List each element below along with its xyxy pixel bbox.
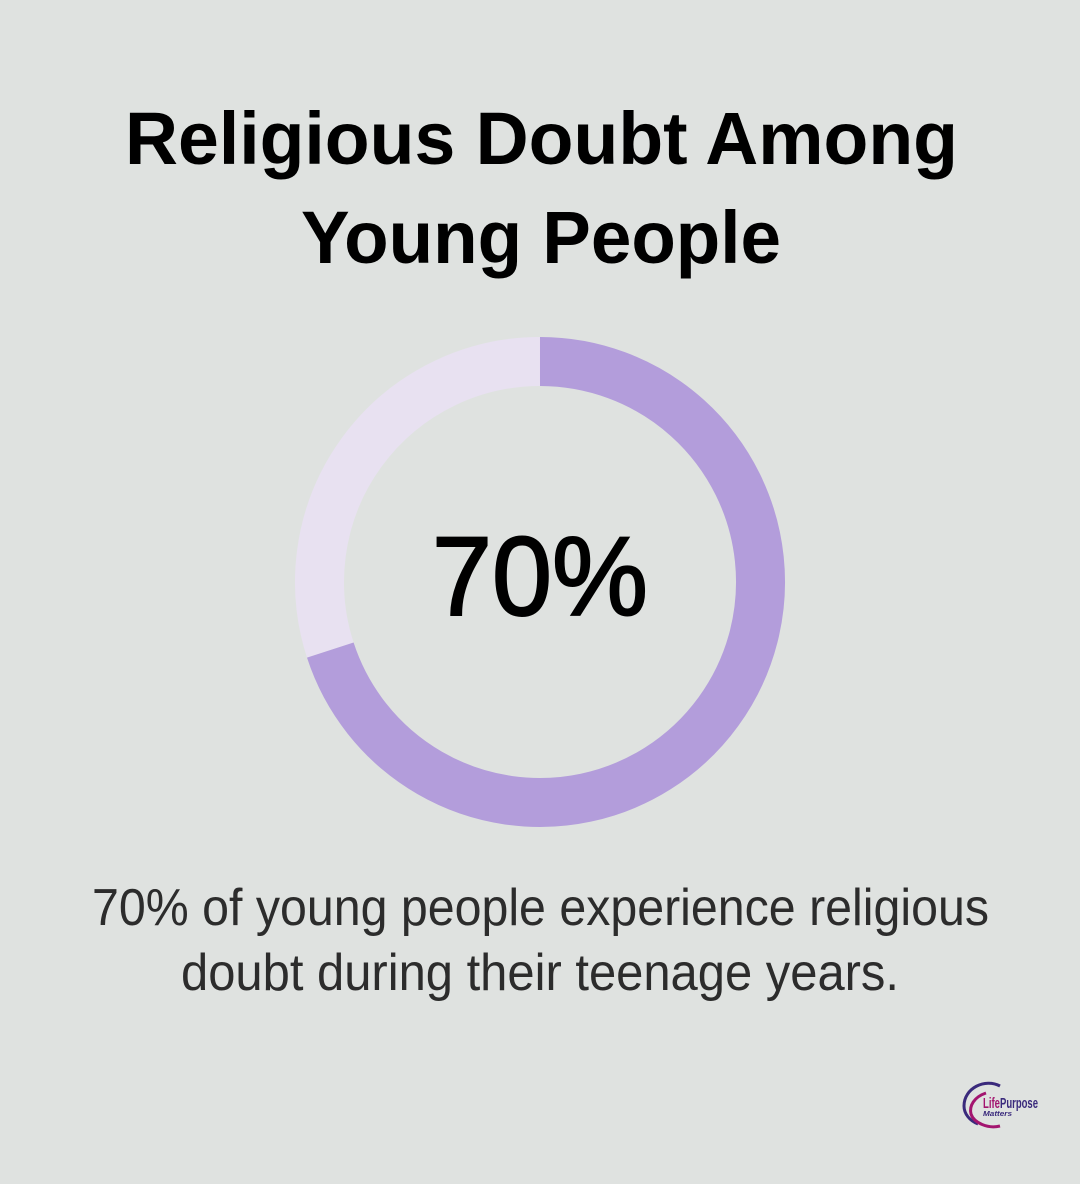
description: doubt during their teenage years. bbox=[181, 944, 899, 1002]
logo: Matters bbox=[983, 1109, 1012, 1118]
logo: Life bbox=[983, 1095, 1000, 1112]
donut chart: 70% bbox=[320, 362, 761, 802]
ring value: 70% bbox=[330, 362, 761, 802]
title: Religious Doubt Among bbox=[125, 97, 958, 180]
logo: Purpose bbox=[1000, 1095, 1038, 1112]
logo bbox=[964, 1083, 1038, 1127]
description: 70% of young people experience religious bbox=[92, 879, 989, 937]
center value: 70% bbox=[432, 514, 648, 639]
description bbox=[92, 879, 989, 1002]
ring remainder: 30% bbox=[320, 362, 540, 650]
title: Young People bbox=[301, 196, 781, 279]
title bbox=[125, 97, 958, 279]
